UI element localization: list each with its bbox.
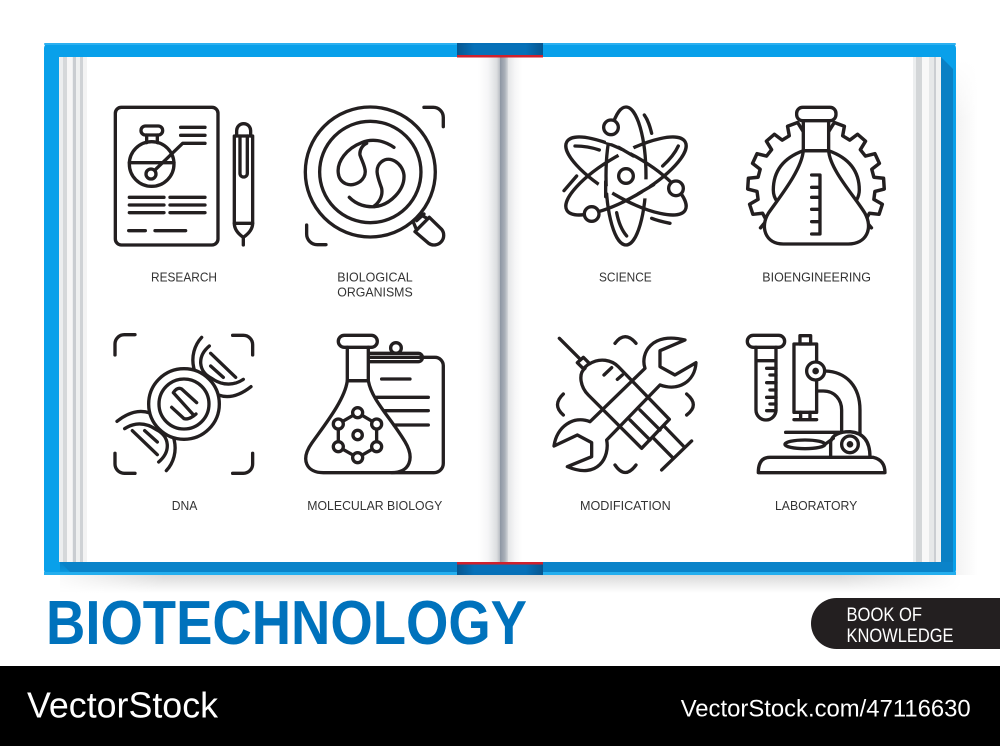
label: molecular biology: MOLECULAR BIOLOGY — [307, 498, 443, 513]
footer url: VectorStock.com/47116630 — [681, 696, 971, 723]
right page stack — [913, 57, 941, 562]
label: dna: DNA — [172, 498, 198, 513]
spine gutter — [478, 57, 522, 562]
label: modification: MODIFICATION — [580, 498, 671, 513]
book — [44, 43, 978, 593]
label: biological organisms: ORGANISMS — [337, 285, 413, 300]
right page — [508, 57, 913, 562]
badge: book of knowledge: BOOK OF — [846, 605, 922, 626]
top ribbon band — [457, 43, 543, 58]
footer logo: VectorStock — [27, 684, 219, 726]
icon: modification — [554, 337, 696, 472]
icon: science atom — [556, 107, 696, 245]
icon: biological organisms — [305, 107, 444, 245]
label: science: SCIENCE — [599, 270, 652, 285]
label: biological organisms — [337, 270, 413, 300]
badge: book of knowledge: KNOWLEDGE — [846, 626, 954, 647]
icon: molecular biology — [306, 335, 443, 473]
icon: research — [115, 107, 253, 245]
label: laboratory: LABORATORY — [775, 498, 858, 513]
left page stack — [59, 57, 87, 562]
left page — [87, 57, 500, 562]
icon: laboratory — [747, 335, 885, 473]
badge: book of knowledge — [811, 598, 1000, 649]
footer bar — [0, 666, 1000, 746]
icon: bioengineering — [748, 107, 884, 244]
icon: dna — [115, 335, 253, 473]
book cover — [44, 43, 956, 575]
bottom ribbon band — [457, 562, 543, 575]
label: bioengineering: BIOENGINEERING — [762, 270, 871, 285]
label: research: RESEARCH — [151, 270, 217, 285]
title: BIOTECHNOLOGY — [46, 589, 527, 658]
label: biological organisms: BIOLOGICAL — [337, 270, 413, 285]
